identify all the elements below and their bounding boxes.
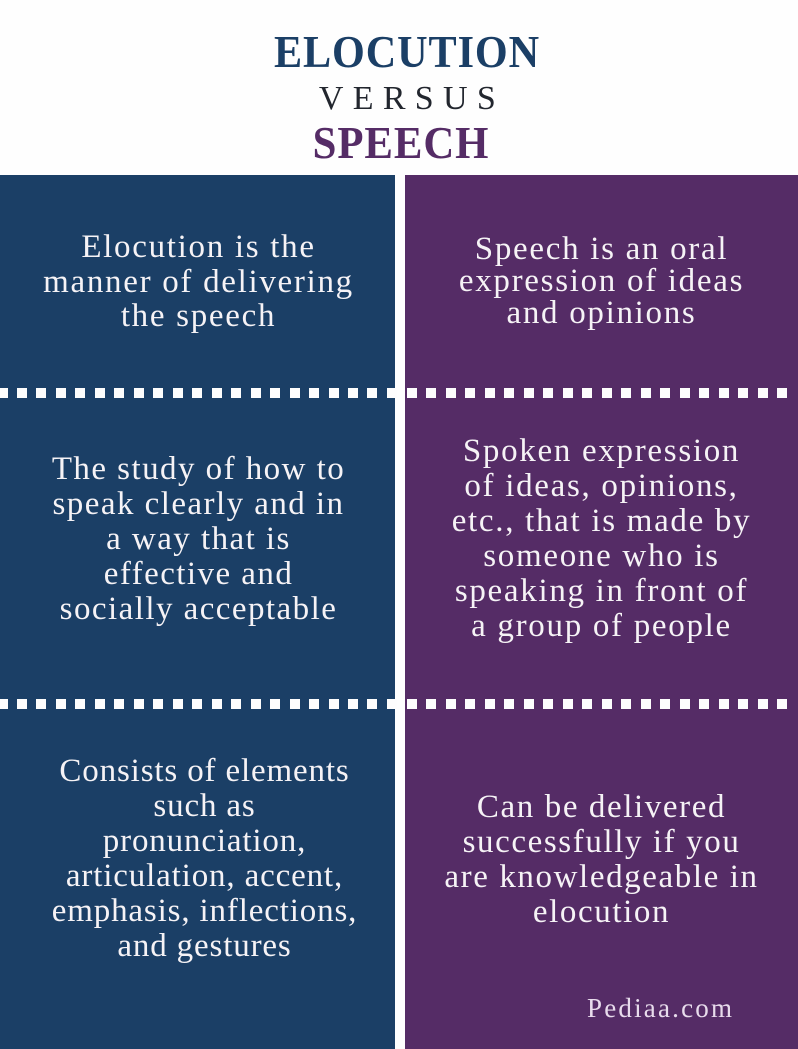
text: elocution row 3: such as bbox=[153, 788, 256, 824]
text: speech row 2: of ideas, opinions, bbox=[464, 468, 739, 504]
text: speech row 3: elocution bbox=[533, 894, 670, 930]
panel: speech column bbox=[405, 175, 798, 1049]
text: speech row 3: successfully if you bbox=[463, 824, 740, 860]
text: elocution row 1: manner of delivering bbox=[43, 264, 354, 300]
text: elocution row 2: effective and bbox=[104, 556, 293, 592]
text: elocution row 2: speak clearly and in bbox=[53, 486, 344, 522]
text: elocution row 1: Elocution is the bbox=[81, 229, 316, 265]
divider: second dotted row bbox=[0, 699, 787, 709]
text: speech row 3: Can be delivered bbox=[477, 789, 726, 825]
text: speech row 3 bbox=[444, 789, 759, 930]
text: elocution row 3 bbox=[52, 753, 357, 964]
title: elocution: ELOCUTION bbox=[274, 26, 540, 77]
text: elocution row 3: and gestures bbox=[117, 928, 292, 964]
text: speech row 3: are knowledgeable in bbox=[444, 859, 759, 895]
text: elocution row 3: emphasis, inflections, bbox=[52, 893, 357, 929]
title: versus: VERSUS bbox=[319, 80, 505, 117]
text: elocution row 2: socially acceptable bbox=[60, 591, 337, 627]
text: elocution row 3: articulation, accent, bbox=[66, 858, 343, 894]
logo: Pediaa.com: Pediaa.com bbox=[587, 993, 734, 1023]
text: elocution row 2 bbox=[52, 451, 345, 627]
text: speech row 2: etc., that is made by bbox=[452, 503, 751, 539]
text: speech row 2: speaking in front of bbox=[455, 573, 748, 609]
text: elocution row 3: pronunciation, bbox=[103, 823, 306, 859]
text: elocution row 3: Consists of elements bbox=[59, 753, 350, 789]
title: speech: SPEECH bbox=[313, 117, 489, 168]
panel: elocution column bbox=[0, 175, 395, 1049]
text: elocution row 2: The study of how to bbox=[52, 451, 345, 487]
text: elocution row 2: a way that is bbox=[106, 521, 291, 557]
text: speech row 1: expression of ideas bbox=[459, 263, 744, 299]
text: speech row 1 bbox=[459, 231, 744, 331]
text: speech row 2: someone who is bbox=[483, 538, 720, 574]
text: speech row 2: a group of people bbox=[471, 608, 732, 644]
text: speech row 2 bbox=[452, 433, 751, 644]
text: speech row 2: Spoken expression bbox=[463, 433, 740, 469]
text: elocution row 1 bbox=[43, 229, 354, 334]
text: speech row 1: Speech is an oral bbox=[475, 231, 728, 267]
divider: first dotted row bbox=[0, 388, 787, 398]
text: speech row 1: and opinions bbox=[506, 295, 696, 331]
text: elocution row 1: the speech bbox=[121, 298, 276, 334]
